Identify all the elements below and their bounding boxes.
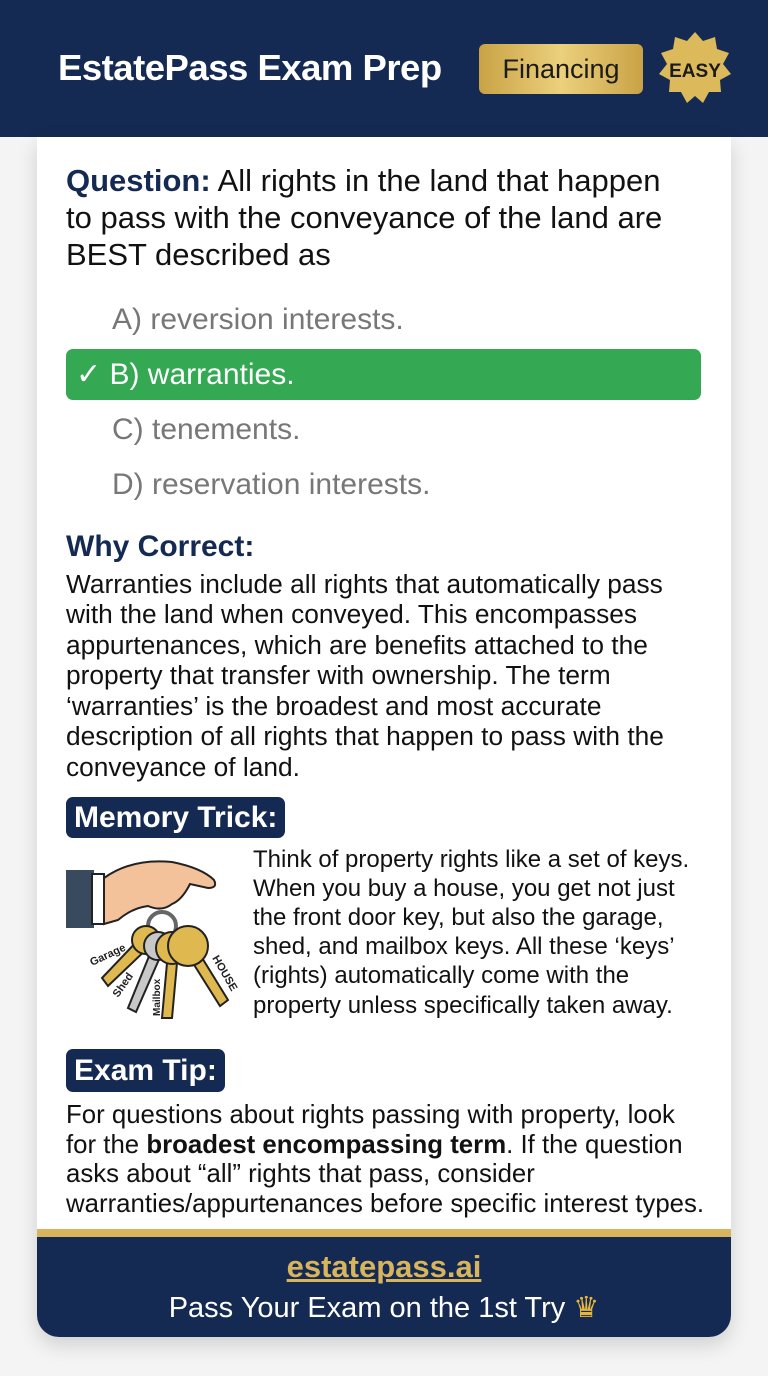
footer: [37, 1229, 731, 1337]
main card: [37, 137, 731, 1337]
memory trick label: Memory Trick:: [74, 801, 277, 834]
correct option: ✓ B) warranties.: [76, 358, 295, 391]
icon: hand holding keys: Shed: [111, 971, 136, 1000]
text: the front door key, but also the garage,: [253, 904, 663, 931]
category badge: Financing: [502, 54, 620, 84]
text: shed, and mailbox keys. All these ‘keys’: [253, 933, 675, 960]
text: A) reversion interests.: [112, 303, 404, 336]
text: description of all rights that happen to pass with the: [66, 721, 664, 751]
exam tip label: [66, 1049, 225, 1092]
exam tip label: Exam Tip:: [74, 1054, 217, 1087]
text: property unless specifically taken away.: [253, 992, 673, 1019]
text: C) tenements.: [112, 413, 300, 446]
icon: hand holding keys: Garage: [88, 942, 128, 969]
text: conveyance of land.: [66, 752, 300, 782]
text: (rights) automatically come with the: [253, 962, 629, 989]
title: EstatePass Exam Prep: [58, 47, 442, 88]
why correct heading: Why Correct:: [66, 530, 254, 563]
text: BEST described as: [66, 237, 331, 272]
correct option: [66, 349, 701, 400]
text: Question: All rights in the land that happen: [66, 163, 660, 198]
text: ‘warranties’ is the broadest and most accurate: [66, 691, 601, 721]
icon: hand holding keys: Mailbox: [152, 978, 163, 1016]
category badge: [479, 44, 643, 94]
memory trick text: [253, 846, 689, 1019]
explanation text: [66, 569, 664, 782]
text: asks about “all” rights that pass, consider: [66, 1160, 535, 1188]
options: [66, 303, 701, 501]
footer tagline: Pass Your Exam on the 1st Try ♛: [169, 1292, 599, 1324]
text: property that transfer with ownership. The term: [66, 660, 611, 690]
icon: hand holding keys: [66, 860, 239, 1019]
header bar: [0, 0, 768, 137]
question: [66, 163, 662, 272]
text: appurtenances, which are benefits attached to the: [66, 630, 648, 660]
text: warranties/appurtenances before specific interest types.: [66, 1190, 704, 1218]
text: for the broadest encompassing term. If the question: [66, 1131, 683, 1159]
text: Warranties include all rights that automatically pass: [66, 569, 663, 599]
text: with the land when conveyed. This encompasses: [66, 599, 637, 629]
exam tip text: [66, 1101, 704, 1218]
footer url: estatepass.ai: [287, 1249, 481, 1284]
difficulty seal: [659, 32, 731, 103]
icon: hand holding keys: HOUSE: [209, 954, 239, 993]
difficulty seal: EASY: [669, 61, 721, 82]
text: Think of property rights like a set of keys.: [253, 846, 689, 873]
text: When you buy a house, you get not just: [253, 875, 675, 902]
text: For questions about rights passing with property, look: [66, 1101, 675, 1129]
text: D) reservation interests.: [112, 468, 430, 501]
text: to pass with the conveyance of the land are: [66, 200, 662, 235]
